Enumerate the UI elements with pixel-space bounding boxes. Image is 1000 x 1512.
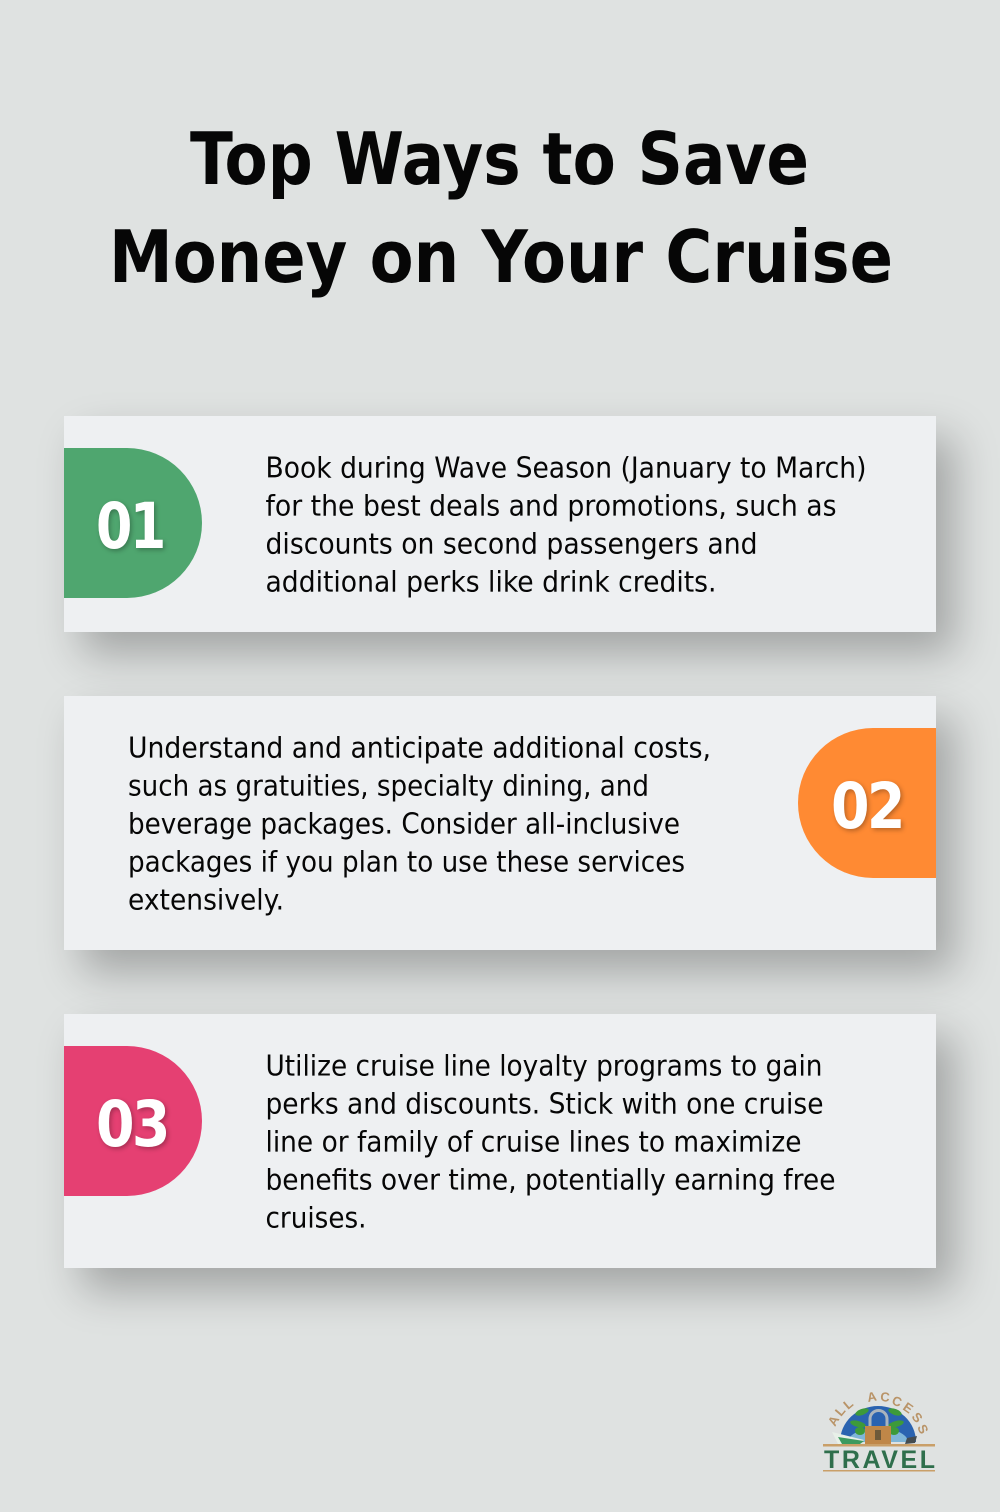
badge: 02 [798, 728, 936, 878]
logo: All Access Travel: E [900, 1399, 916, 1417]
title: Money on Your Cruise [109, 215, 893, 299]
logo: All Access Travel: S [914, 1422, 932, 1436]
text: tip 3: cruises. [266, 1202, 366, 1234]
panel: tip 1 [64, 416, 936, 632]
logo: All Access Travel: S [909, 1409, 926, 1426]
logo: All Access Travel: L [840, 1396, 856, 1412]
logo: All Access Travel: TRAVEL [824, 1446, 935, 1474]
badge: 03: 03 [96, 1088, 168, 1161]
text: tip 2: extensively. [128, 884, 284, 916]
text: tip 2: such as gratuities, specialty dining, and [128, 770, 649, 802]
text: tip 1: additional perks like drink credits. [266, 566, 716, 598]
title [109, 117, 893, 299]
badge: 01 [64, 448, 202, 598]
logo: All Access Travel: A [866, 1388, 878, 1405]
text: tip 2: packages if you plan to use these services [128, 846, 685, 878]
badge: 01: 01 [96, 490, 164, 563]
logo: All Access Travel: C [880, 1389, 891, 1405]
logo: All Access Travel: L [832, 1403, 848, 1419]
text: tip 2: Understand and anticipate additional costs, [128, 732, 711, 764]
title: Top Ways to Save [190, 117, 809, 201]
text: tip 3: line or family of cruise lines to maximize [266, 1126, 802, 1158]
panel: tip 2 [64, 696, 936, 950]
text: tip 1: discounts on second passengers and [266, 528, 758, 560]
text: tip 3: benefits over time, potentially earning free [266, 1164, 836, 1196]
badge: 03 [64, 1046, 202, 1196]
panel: tip 3 [64, 1014, 936, 1268]
text: tip 2: beverage packages. Consider all-inclusive [128, 808, 680, 840]
badge: 02: 02 [831, 770, 903, 843]
text: tip 3: Utilize cruise line loyalty programs to gain [266, 1050, 822, 1082]
text: tip 1 [266, 452, 866, 598]
text: tip 3: perks and discounts. Stick with one cruise [266, 1088, 824, 1120]
text: tip 1: for the best deals and promotions, such as [266, 490, 836, 522]
logo: All Access Travel: A [825, 1412, 843, 1428]
text: tip 1: Book during Wave Season (January to March) [266, 452, 866, 484]
text: tip 2 [128, 732, 711, 916]
logo: All Access Travel: C [890, 1393, 905, 1410]
